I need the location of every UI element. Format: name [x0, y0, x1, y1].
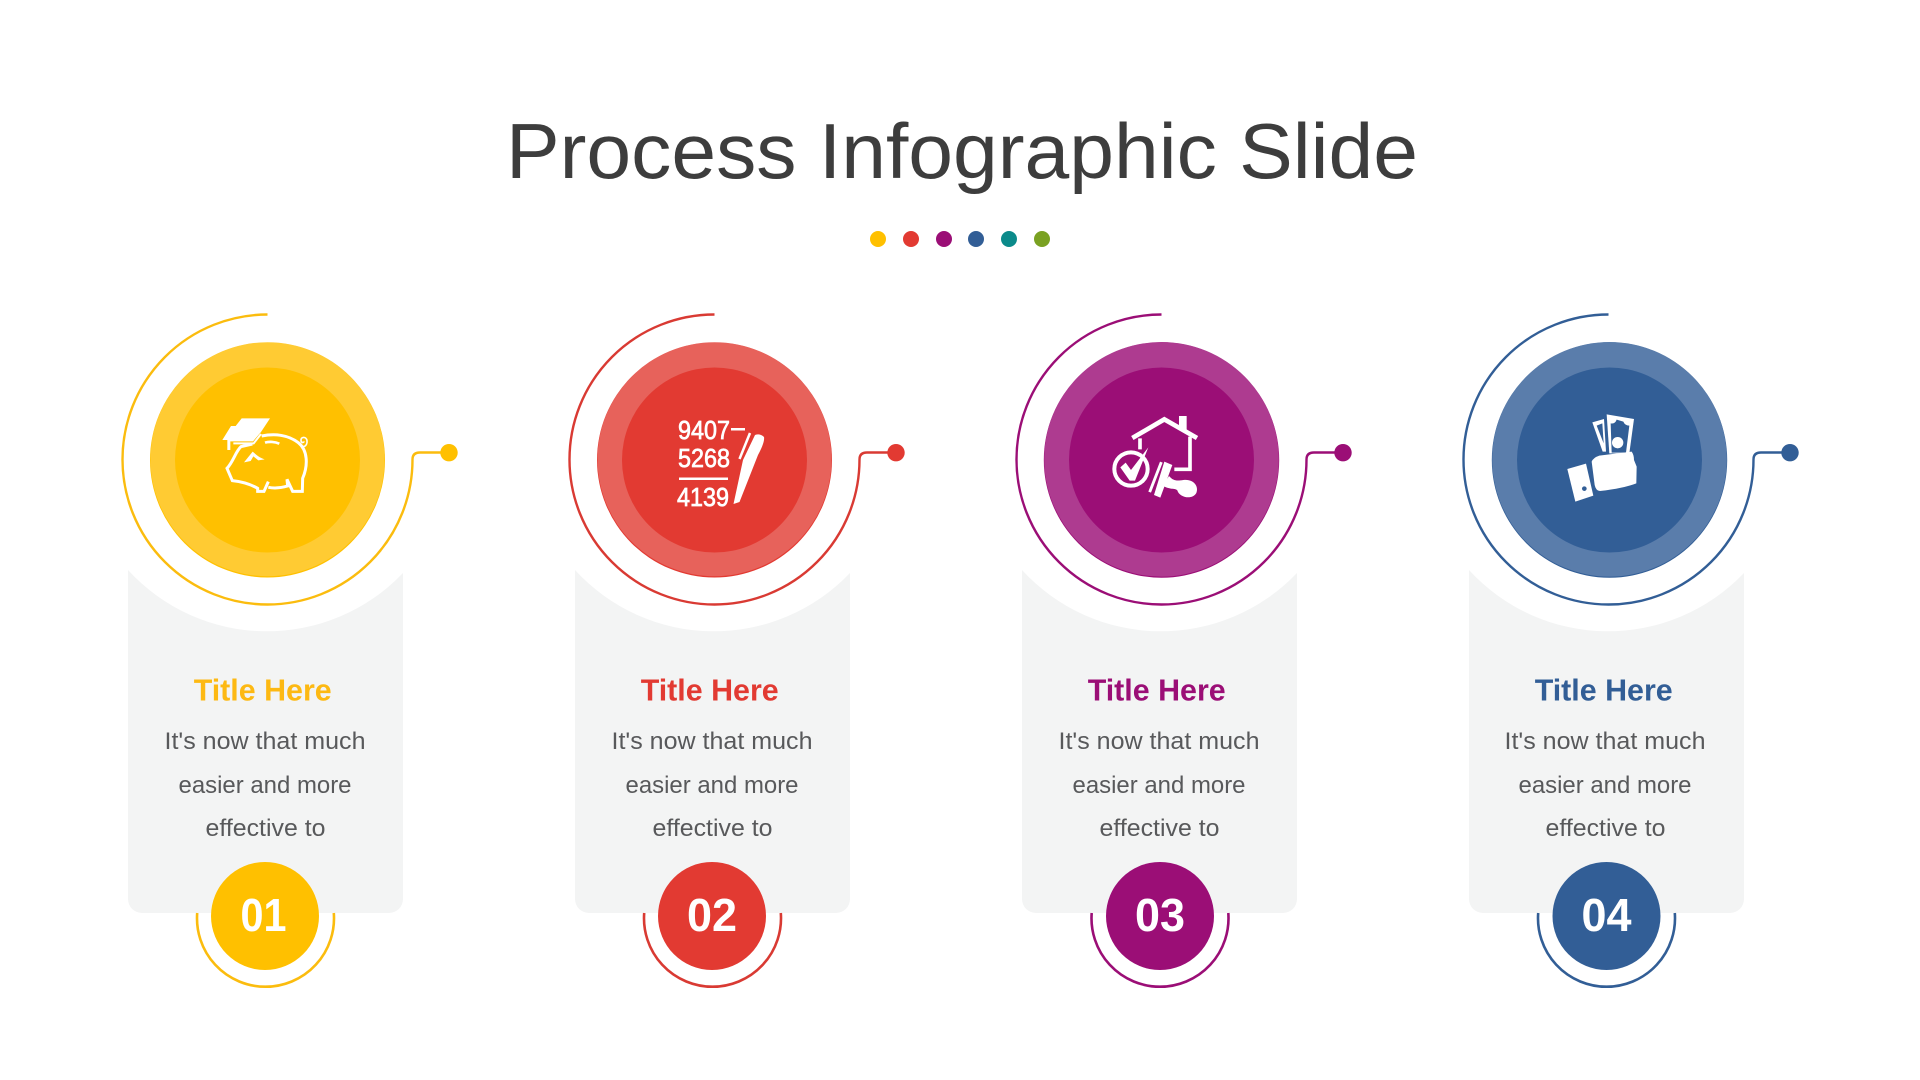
- number badge: [1092, 862, 1229, 987]
- card background: [128, 570, 403, 913]
- title: Process Infographic Slide: [506, 107, 1418, 195]
- heading: Title Here: [641, 672, 779, 708]
- icon: hand holding banknotes: [1567, 414, 1637, 502]
- card background: [1022, 570, 1297, 913]
- main circle: [1492, 342, 1727, 578]
- body text: effective to: [1100, 815, 1220, 842]
- panel: step 3: [1016, 314, 1352, 987]
- number badge: 03: [1135, 889, 1185, 941]
- body text: easier and more: [1072, 772, 1246, 799]
- colour dots row: [870, 231, 1050, 247]
- heading: Title Here: [1088, 672, 1226, 708]
- spiral ring with connector dot: [1464, 314, 1799, 604]
- body text: It's now that much: [612, 728, 812, 755]
- panel: step 1: [123, 314, 458, 987]
- card background: [1469, 570, 1744, 913]
- panel: step 2: [570, 314, 905, 987]
- body text: effective to: [1546, 815, 1666, 842]
- body text: easier and more: [626, 772, 798, 799]
- spiral ring with connector dot: [123, 314, 458, 604]
- number badge: 01: [240, 889, 286, 941]
- body text: easier and more: [1518, 772, 1692, 799]
- body text: [612, 728, 812, 842]
- spiral ring with connector dot: [1016, 314, 1352, 604]
- panel: step 4: [1464, 314, 1799, 987]
- main circle: [597, 342, 832, 578]
- icon: subtraction sum with pen: [677, 415, 764, 512]
- number badge: [197, 862, 334, 987]
- icon: subtraction sum with pen: 9407: [678, 415, 730, 445]
- main circle: [1044, 342, 1279, 578]
- icon: piggy bank with graduation cap: [222, 418, 307, 491]
- body text: [164, 728, 366, 842]
- body text: It's now that much: [164, 728, 366, 755]
- body text: effective to: [652, 815, 772, 842]
- body text: [1058, 728, 1260, 842]
- spiral ring with connector dot: [570, 314, 905, 604]
- body text: effective to: [206, 815, 326, 842]
- number badge: [1538, 862, 1675, 987]
- main circle: [150, 342, 385, 578]
- number badge: 04: [1582, 889, 1632, 941]
- body text: [1504, 728, 1706, 842]
- icon: house with check mark and stamp: [1114, 416, 1197, 498]
- card background: [575, 570, 850, 913]
- heading: Title Here: [194, 672, 332, 708]
- icon: subtraction sum with pen: 5268: [678, 443, 730, 473]
- number badge: 02: [687, 889, 737, 941]
- number badge: [644, 862, 781, 987]
- body text: easier and more: [178, 772, 352, 799]
- body text: It's now that much: [1504, 728, 1706, 755]
- heading: Title Here: [1535, 672, 1673, 708]
- icon: subtraction sum with pen: 4139: [677, 482, 729, 512]
- body text: It's now that much: [1058, 728, 1260, 755]
